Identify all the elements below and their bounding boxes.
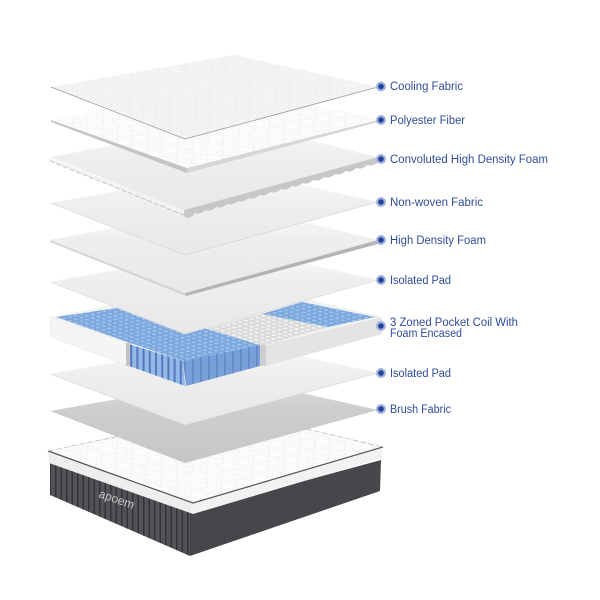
layer: cooling fabric [51,55,378,139]
layer: high density foam [50,205,378,296]
label: non-woven fabric: Non-woven Fabric [390,197,483,209]
label: isolated pad lower: Isolated Pad [390,368,451,380]
foam top rim [50,282,382,346]
label: pocket coil: 3 Zoned Pocket Coil With [390,317,518,329]
label: high density foam: High Density Foam [390,235,486,247]
layer: pocket coil [50,282,382,386]
label: polyester fiber: Polyester Fiber [390,115,465,127]
foam right side [262,317,382,366]
blue right coils [262,302,375,327]
foam left side [50,317,128,366]
mattress top [48,412,383,503]
layer: non-woven fabric [50,170,378,255]
mattress side panels [50,460,381,556]
label: brush fabric: Brush Fabric [390,404,451,416]
layer: isolated pad lower [50,341,378,425]
blue coils front face [183,345,260,386]
mattress back edge [48,412,383,451]
white center coils [207,314,328,346]
foam block inner edge [126,343,130,366]
layer: polyester fiber [51,86,378,173]
layer: convoluted foam [50,122,378,218]
layer: isolated pad upper [50,248,378,334]
label: cooling fabric: Cooling Fabric [390,81,463,93]
label: pocket coil [376,317,518,340]
blue left coils top [56,308,260,361]
mattress [48,412,383,556]
label: convoluted high density foam: Convoluted High Density Foam [390,154,548,166]
brand logo: apoem [97,487,136,512]
mattress white band [48,447,383,514]
mattress piping [48,447,383,503]
coil cut edge [260,345,266,366]
label: isolated pad upper: Isolated Pad [390,275,451,287]
layer: brush fabric [50,378,378,463]
label: pocket coil: Foam Encased [390,328,462,340]
blue coils left face [129,344,185,386]
